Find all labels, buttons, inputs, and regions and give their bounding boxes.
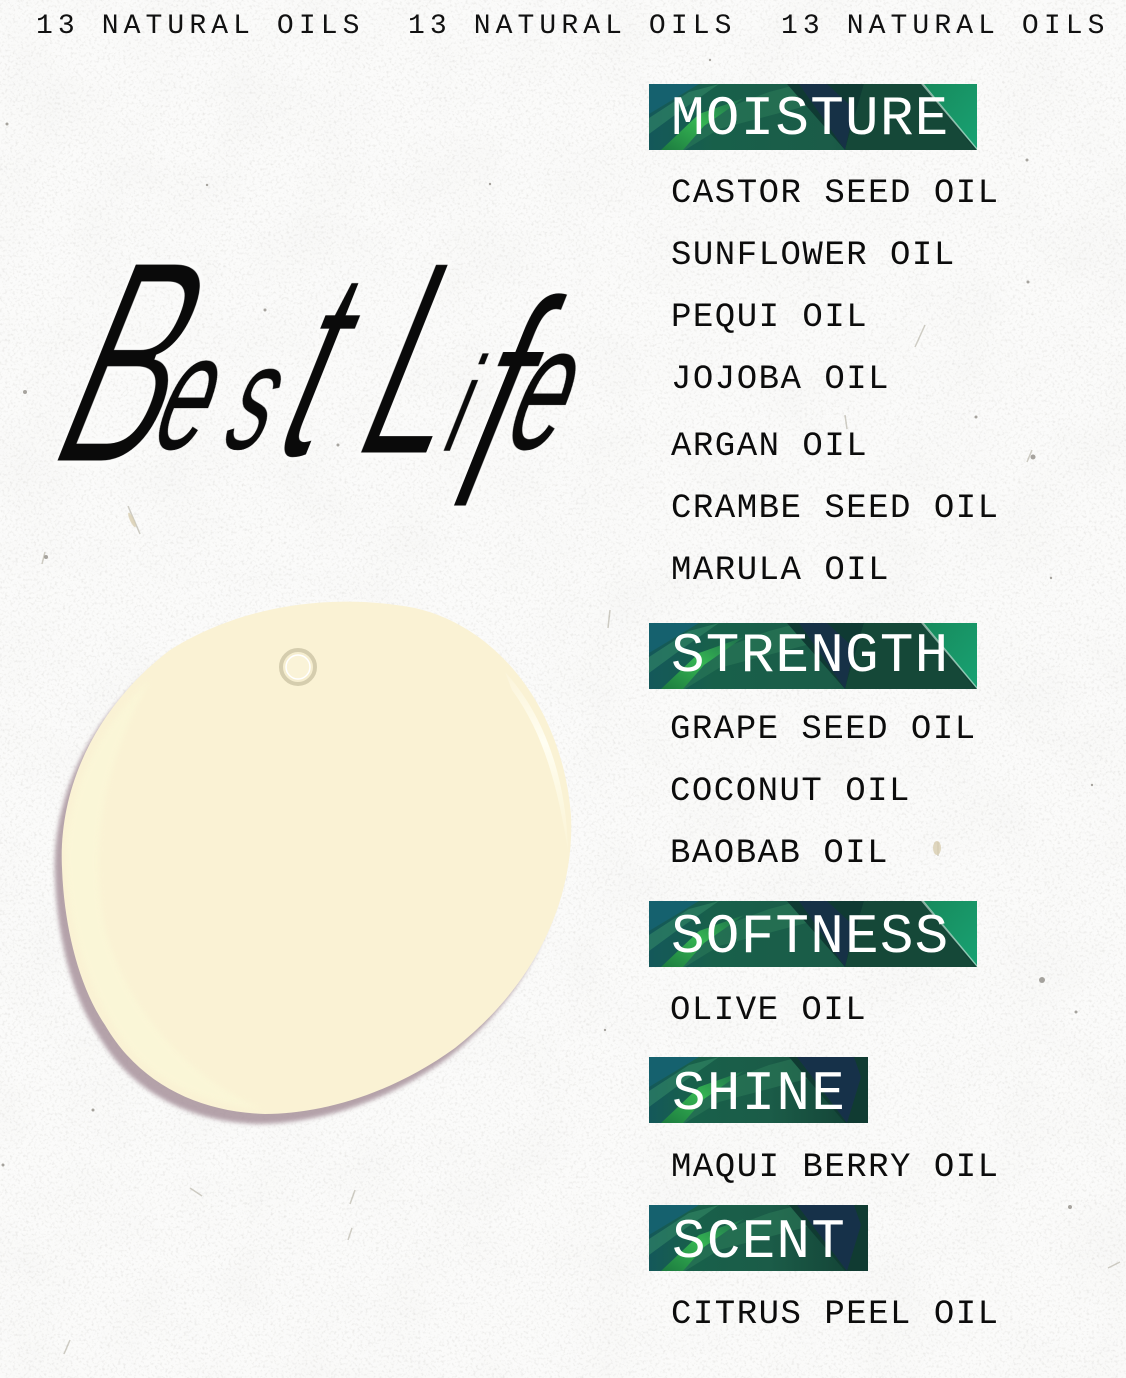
- script title: Best Life: e: [131, 299, 256, 484]
- moisture oils list: CASTOR SEED OIL: [671, 175, 1000, 213]
- right highlight: [505, 672, 568, 850]
- air bubble: [281, 650, 315, 684]
- top ticker: 13 natural oils: 13 NATURAL OILS: [781, 11, 1110, 42]
- script title: Best Life: [0, 199, 653, 572]
- top ticker: 13 natural oils: [36, 11, 1110, 42]
- shine banner: SHINE: [672, 1062, 846, 1126]
- moisture oils list: JOJOBA OIL: [671, 361, 890, 399]
- moisture banner: MOISTURE: [671, 87, 949, 151]
- moisture oils list: SUNFLOWER OIL: [671, 237, 956, 275]
- softness banner: SOFTNESS: [671, 905, 949, 969]
- swatch body: [62, 602, 571, 1114]
- oil swatch: [55, 602, 571, 1124]
- panel: moisture: [649, 84, 1000, 590]
- script title: Best Life: s: [204, 315, 313, 482]
- script title: Best Life: i: [427, 329, 504, 480]
- left soft glow: [66, 680, 265, 1110]
- swatch shadow: [55, 612, 564, 1124]
- strength banner: STRENGTH: [671, 624, 949, 688]
- script title: Best Life: L: [322, 201, 533, 515]
- script title: Best Life: f: [411, 238, 591, 572]
- top ticker: 13 natural oils: 13 NATURAL OILS: [36, 11, 365, 42]
- moisture oils list: MARULA OIL: [671, 552, 890, 590]
- panel: softness: [649, 901, 977, 1030]
- panel: strength: [649, 623, 977, 873]
- shine oil: MAQUI BERRY OIL: [671, 1149, 1000, 1187]
- strength oils list: BAOBAB OIL: [670, 835, 889, 873]
- panel: scent: [649, 1205, 1000, 1334]
- script title: Best Life: e: [483, 289, 617, 488]
- moisture oils list: CRAMBE SEED OIL: [671, 490, 1000, 528]
- top ticker: 13 natural oils: 13 NATURAL OILS: [408, 11, 737, 42]
- moisture oils list: PEQUI OIL: [671, 299, 868, 337]
- moisture oils list: [671, 175, 1000, 590]
- scent oil: CITRUS PEEL OIL: [671, 1296, 1000, 1334]
- script title: Best Life: B: [17, 199, 255, 525]
- softness oil: OLIVE OIL: [670, 992, 867, 1030]
- panel: shine: [649, 1057, 1000, 1187]
- strength oils list: COCONUT OIL: [670, 773, 911, 811]
- strength oils list: GRAPE SEED OIL: [670, 711, 977, 749]
- script title: Best Life: t: [242, 211, 405, 515]
- scent banner: SCENT: [672, 1210, 846, 1274]
- strength oils list: [670, 711, 977, 873]
- moisture oils list: ARGAN OIL: [671, 428, 868, 466]
